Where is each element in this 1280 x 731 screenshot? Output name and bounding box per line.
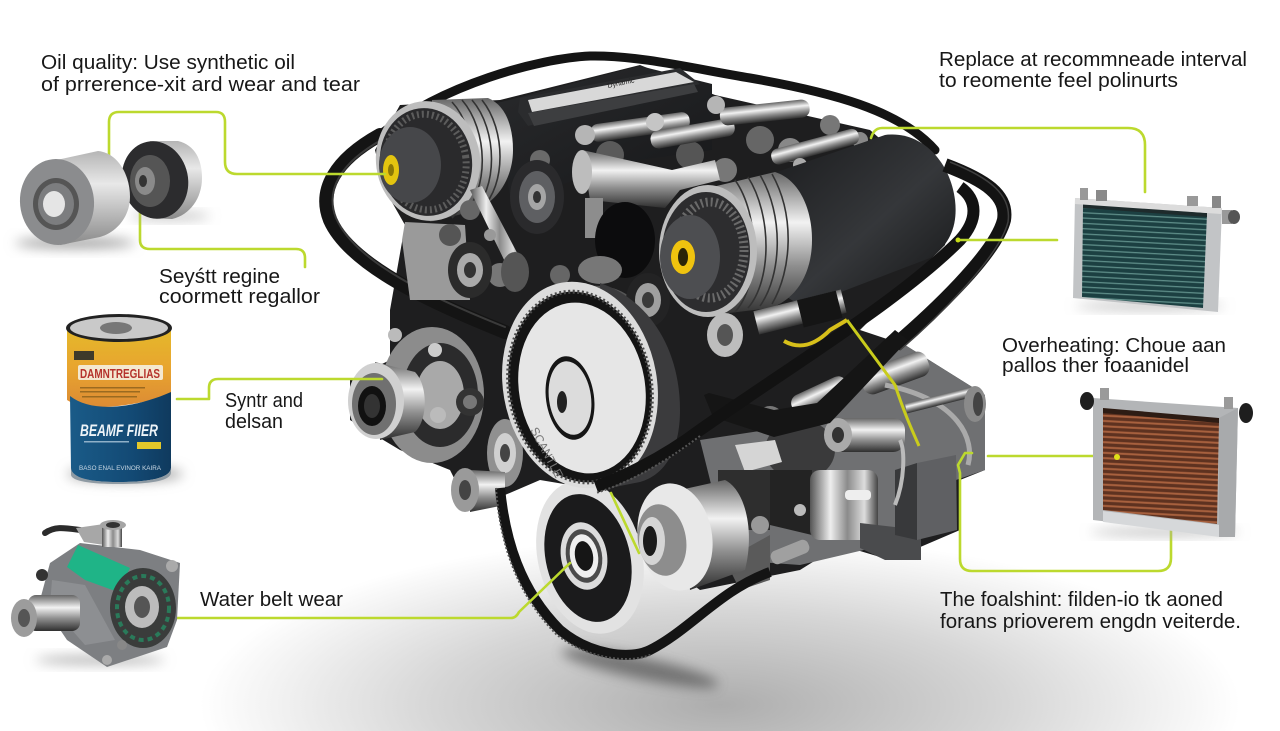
front bearing xyxy=(16,151,130,249)
yellow lead to lower right xyxy=(847,320,919,446)
flywheel: SCANTLE xyxy=(527,425,566,480)
leader: water pump xyxy=(177,563,570,618)
callout lines xyxy=(109,112,1171,618)
text: water belt: Water belt wear xyxy=(200,589,343,611)
text: oil quality: Oil quality: Use synthetic oil xyxy=(41,52,295,74)
flywheel xyxy=(486,269,680,501)
front idler xyxy=(626,273,670,327)
lower pulley xyxy=(521,469,659,645)
icon: bearings xyxy=(15,135,210,249)
icon: water pump xyxy=(11,520,180,667)
callout dots xyxy=(956,238,1120,460)
icon: brown radiator xyxy=(1080,388,1253,537)
engine silhouette xyxy=(350,65,985,590)
icon: green radiator xyxy=(1073,188,1240,312)
inner toothed belt xyxy=(596,187,974,493)
small front pulley xyxy=(629,477,749,597)
leader: lower right loop xyxy=(958,453,1171,571)
black cylinder xyxy=(768,134,956,304)
valve cover xyxy=(478,66,712,195)
text: oil quality: of prrerence-xit ard wear and tear xyxy=(41,74,360,96)
yellow tube xyxy=(784,320,847,345)
small idler pulley xyxy=(510,160,564,234)
upper pipes xyxy=(530,96,868,182)
text: foalshint: forans prioverem engdn veiterde. xyxy=(940,611,1241,633)
text: regulator: Seyśtt regine xyxy=(159,266,280,288)
leader: can xyxy=(177,379,382,399)
text: synth and: Syntr and xyxy=(225,390,303,412)
text: replace interval: Replace at recommneade interval xyxy=(939,49,1247,71)
wide belt band xyxy=(704,330,908,437)
icon: oil can: DAMNTREGLIAS xyxy=(80,366,160,381)
top-left pulley xyxy=(368,94,513,228)
leader: brown radiator xyxy=(988,455,1117,457)
leader: regulator xyxy=(140,195,305,267)
text: overheating: pallos ther foaanidel xyxy=(1002,355,1189,377)
text: regulator: coormett regallor xyxy=(159,286,320,308)
front-right pulley xyxy=(659,172,812,317)
leader: top right radiator xyxy=(871,128,1145,192)
icon: oil can: BASO ENAL EVINOR KAIRA xyxy=(79,466,161,472)
right wide belt xyxy=(895,162,1008,350)
big chrome pipe xyxy=(572,150,720,238)
lower-left chrome disc xyxy=(380,327,484,463)
dark inner cavity xyxy=(550,202,655,330)
outer belt xyxy=(326,56,935,332)
text: overheating: Overheating: Choue aan xyxy=(1002,335,1226,357)
back bearing xyxy=(115,135,202,225)
engine assembly xyxy=(326,56,1008,659)
text: synth and: delsan xyxy=(225,411,283,433)
lower right chrome assembly xyxy=(700,345,986,590)
left shaft pulley xyxy=(348,362,425,440)
leader: belt xyxy=(958,239,1057,241)
small low pulleys xyxy=(451,419,523,512)
mid cylinder chrome xyxy=(707,289,847,357)
leader: oil quality xyxy=(109,112,385,174)
valve cover: Dynamic xyxy=(607,77,636,90)
dot on brown radiator xyxy=(1114,454,1120,460)
icon: oil can xyxy=(66,314,183,484)
icon: oil can: BEAMF FIIER xyxy=(80,421,159,440)
left bracket and arm xyxy=(402,186,529,300)
text: replace interval: to reomente feel polinurts xyxy=(939,70,1178,92)
lower toothed belt xyxy=(496,488,770,659)
leader: small pulley xyxy=(611,493,639,553)
text: foalshint: The foalshint: filden-io tk aoned xyxy=(940,589,1223,611)
